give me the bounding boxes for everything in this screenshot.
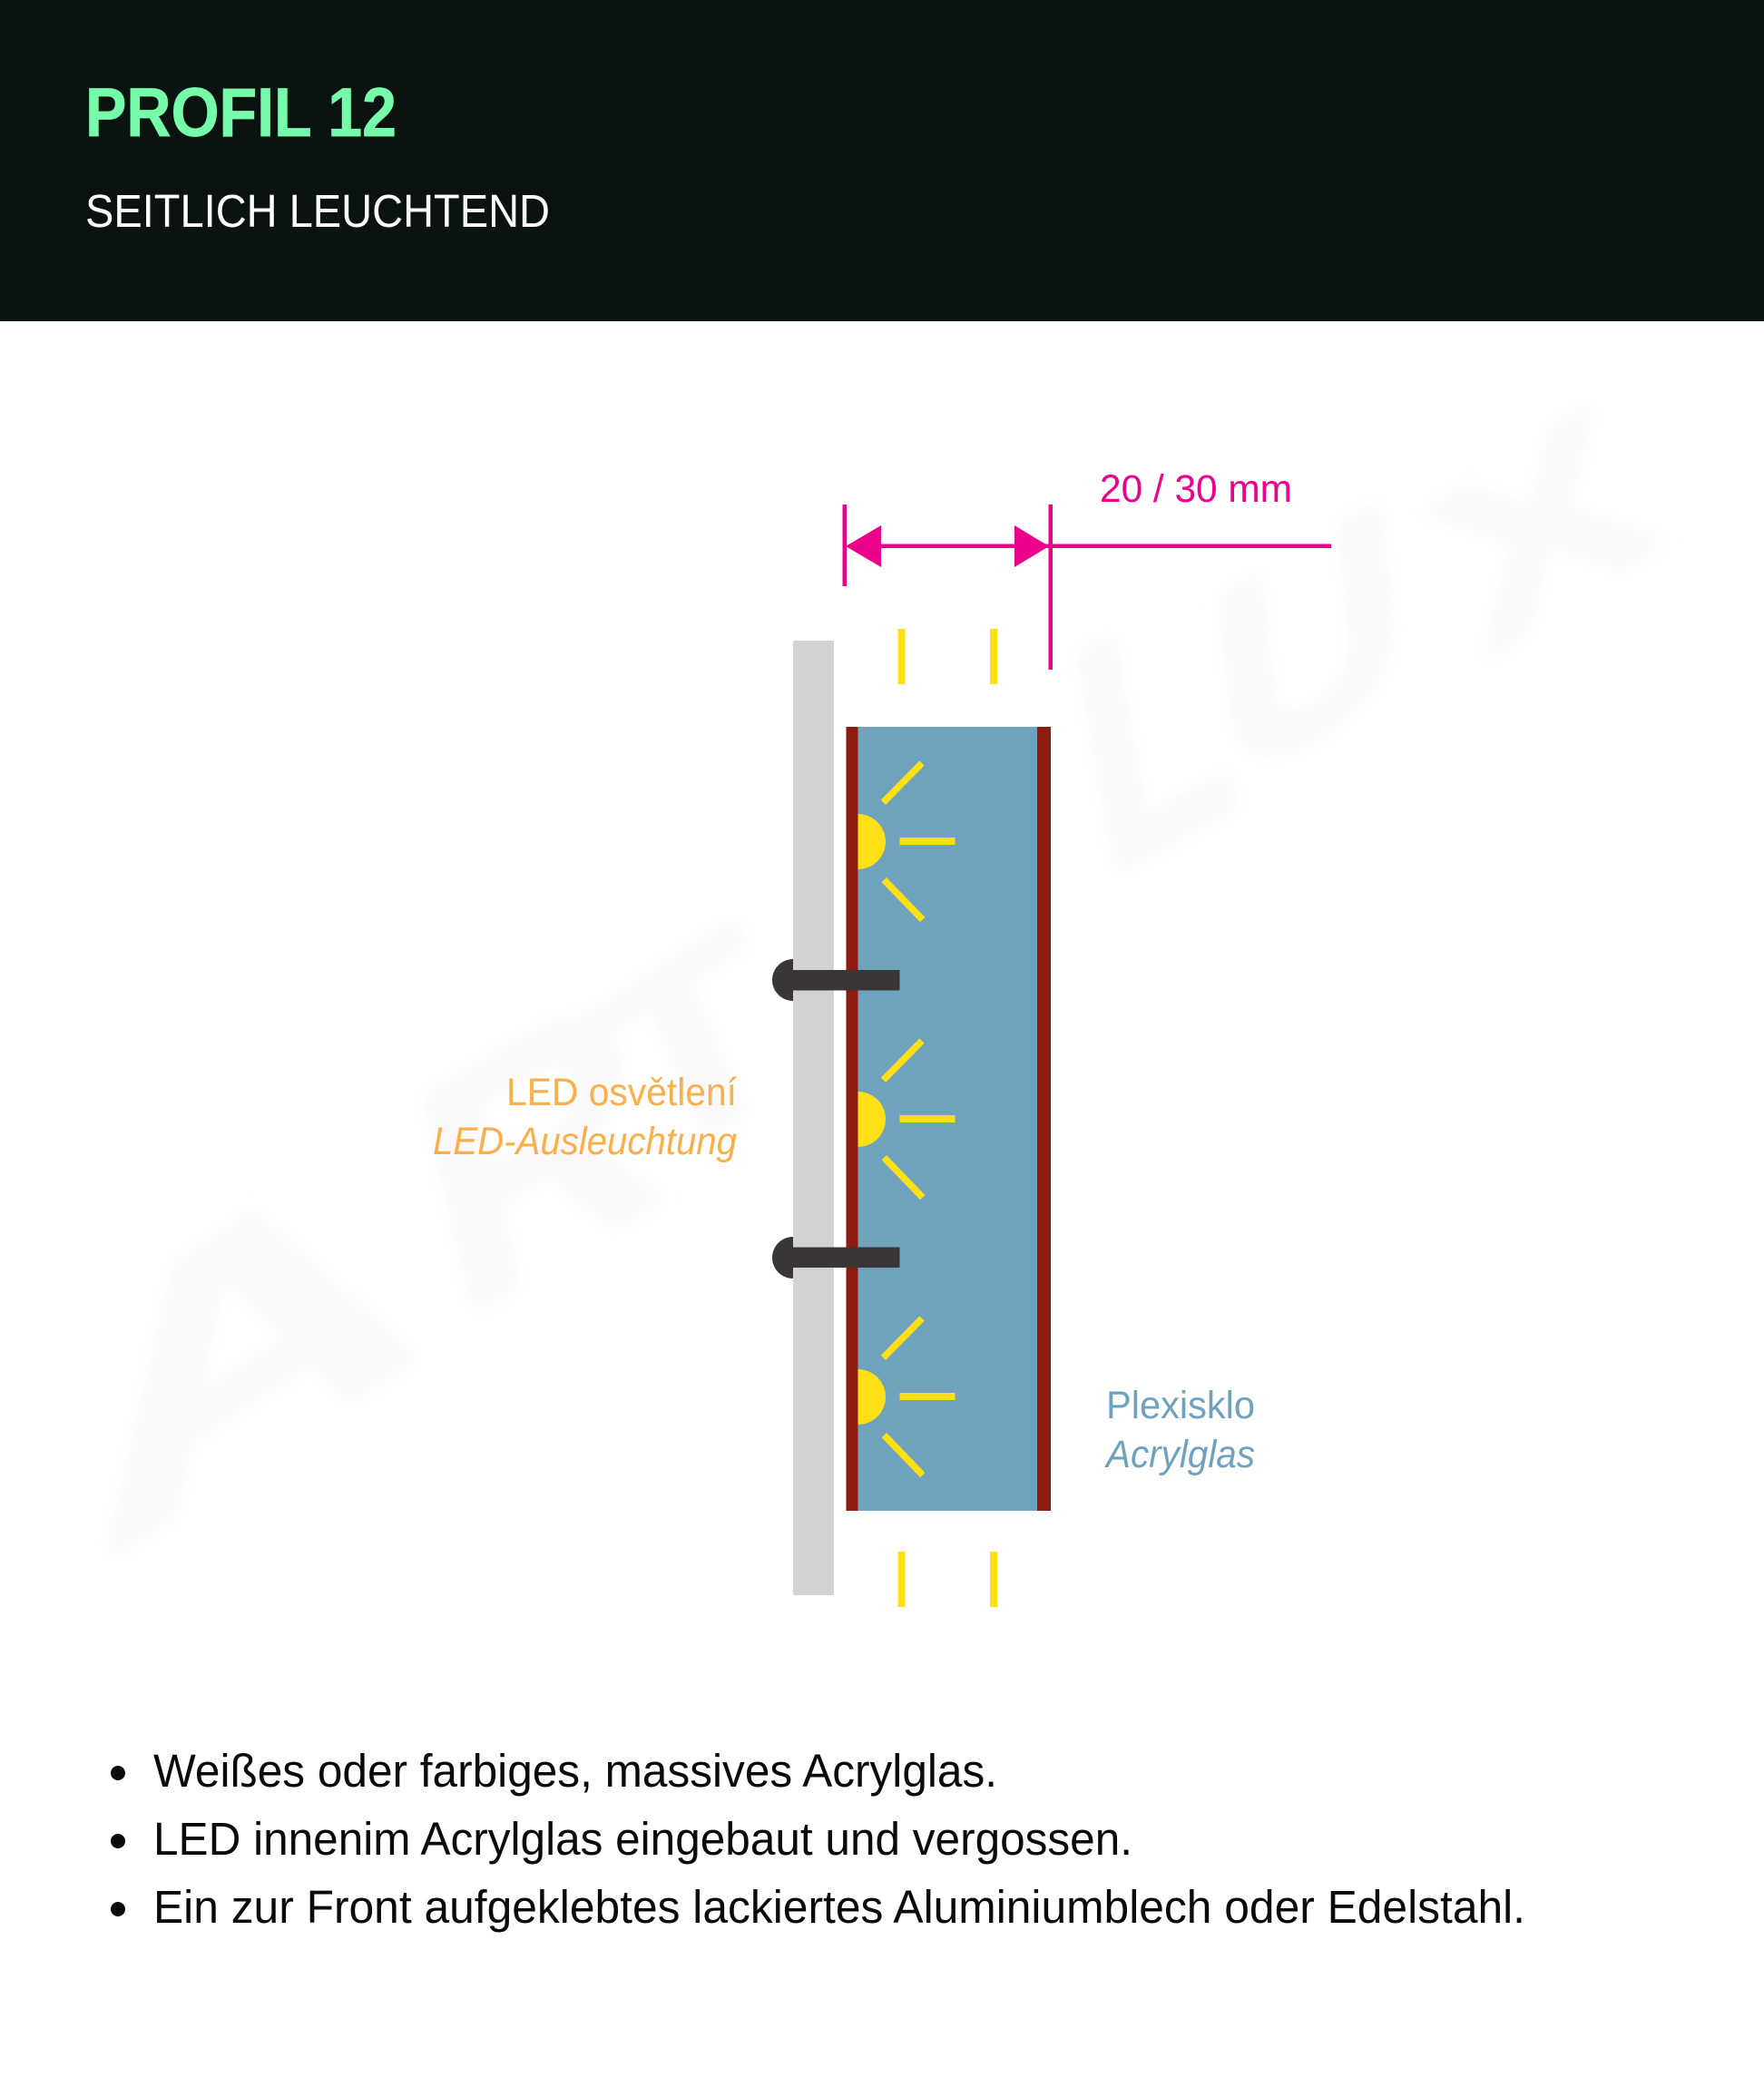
- watermark: X: [1396, 354, 1689, 705]
- bullet list: [111, 1745, 1525, 1933]
- LED 2: [858, 1041, 955, 1198]
- watermark: [35, 354, 1689, 1633]
- wall: [793, 641, 834, 1595]
- label: acrylic glass: [1103, 1384, 1255, 1476]
- bolt 2: [772, 1237, 900, 1279]
- subtitle: SEITLICH LEUCHTEND: [85, 185, 550, 237]
- bolt 1: [772, 959, 900, 1001]
- dimension marker: [842, 467, 1331, 670]
- label: LED lighting: LED-Ausleuchtung: [433, 1120, 737, 1163]
- title: PROFIL 12: [85, 74, 397, 152]
- bullet list: Ein zur Front aufgeklebtes lackiertes Aluminiumblech oder Edelstahl.: [153, 1881, 1525, 1933]
- watermark: T: [561, 869, 824, 1224]
- back metal sheet right: [1037, 727, 1051, 1511]
- label: acrylic glass: Acrylglas: [1103, 1433, 1255, 1476]
- header banner: [0, 0, 1764, 321]
- acrylic glass body: [858, 727, 1037, 1511]
- bullet list: Weißes oder farbiges, massives Acrylglas.: [153, 1745, 997, 1797]
- LED 3: [858, 1318, 955, 1475]
- dimension label: 20 / 30 mm: [1100, 467, 1292, 511]
- label: acrylic glass: Plexisklo: [1106, 1384, 1255, 1427]
- watermark: R: [390, 914, 683, 1389]
- bullet list: LED innenim Acrylglas eingebaut und vergossen.: [153, 1813, 1132, 1865]
- light rays bottom: [898, 1552, 997, 1607]
- label: LED lighting: [433, 1071, 737, 1163]
- label: LED lighting: LED osvětlení: [506, 1071, 737, 1114]
- watermark: A: [35, 1063, 442, 1633]
- front metal sheet left: [846, 727, 858, 1511]
- light rays top: [898, 629, 997, 684]
- watermark: L: [1053, 519, 1254, 946]
- watermark: U: [1200, 435, 1419, 846]
- LED 1: [858, 763, 955, 920]
